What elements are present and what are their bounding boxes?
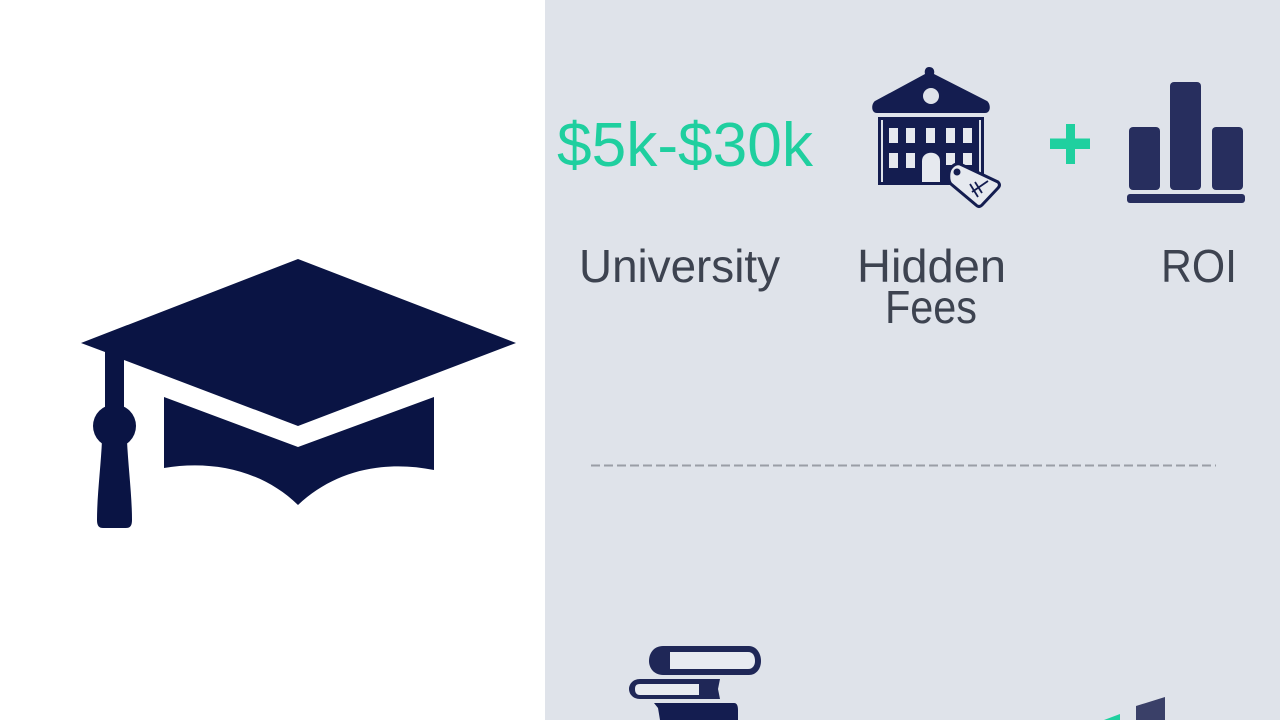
panel: cost breakdown background — [545, 0, 1280, 720]
icon: stack of books — [629, 646, 761, 720]
label: Hidden Fees: Fees — [885, 281, 977, 333]
icon: price tag — [949, 164, 1000, 206]
icon: plus sign — [1050, 124, 1090, 164]
label: ROI: ROI — [1161, 240, 1237, 292]
icon: graduation cap — [81, 259, 516, 528]
label: Hidden Fees — [857, 240, 1006, 333]
icon: university building with price tag — [872, 67, 1000, 206]
label: Hidden Fees: Hidden — [857, 240, 1006, 292]
price range: $5k-$30k — [557, 111, 814, 180]
icon: partial growth arrow — [1104, 697, 1165, 720]
icon: ROI bar chart — [1127, 82, 1245, 203]
label: University: University — [579, 240, 780, 292]
